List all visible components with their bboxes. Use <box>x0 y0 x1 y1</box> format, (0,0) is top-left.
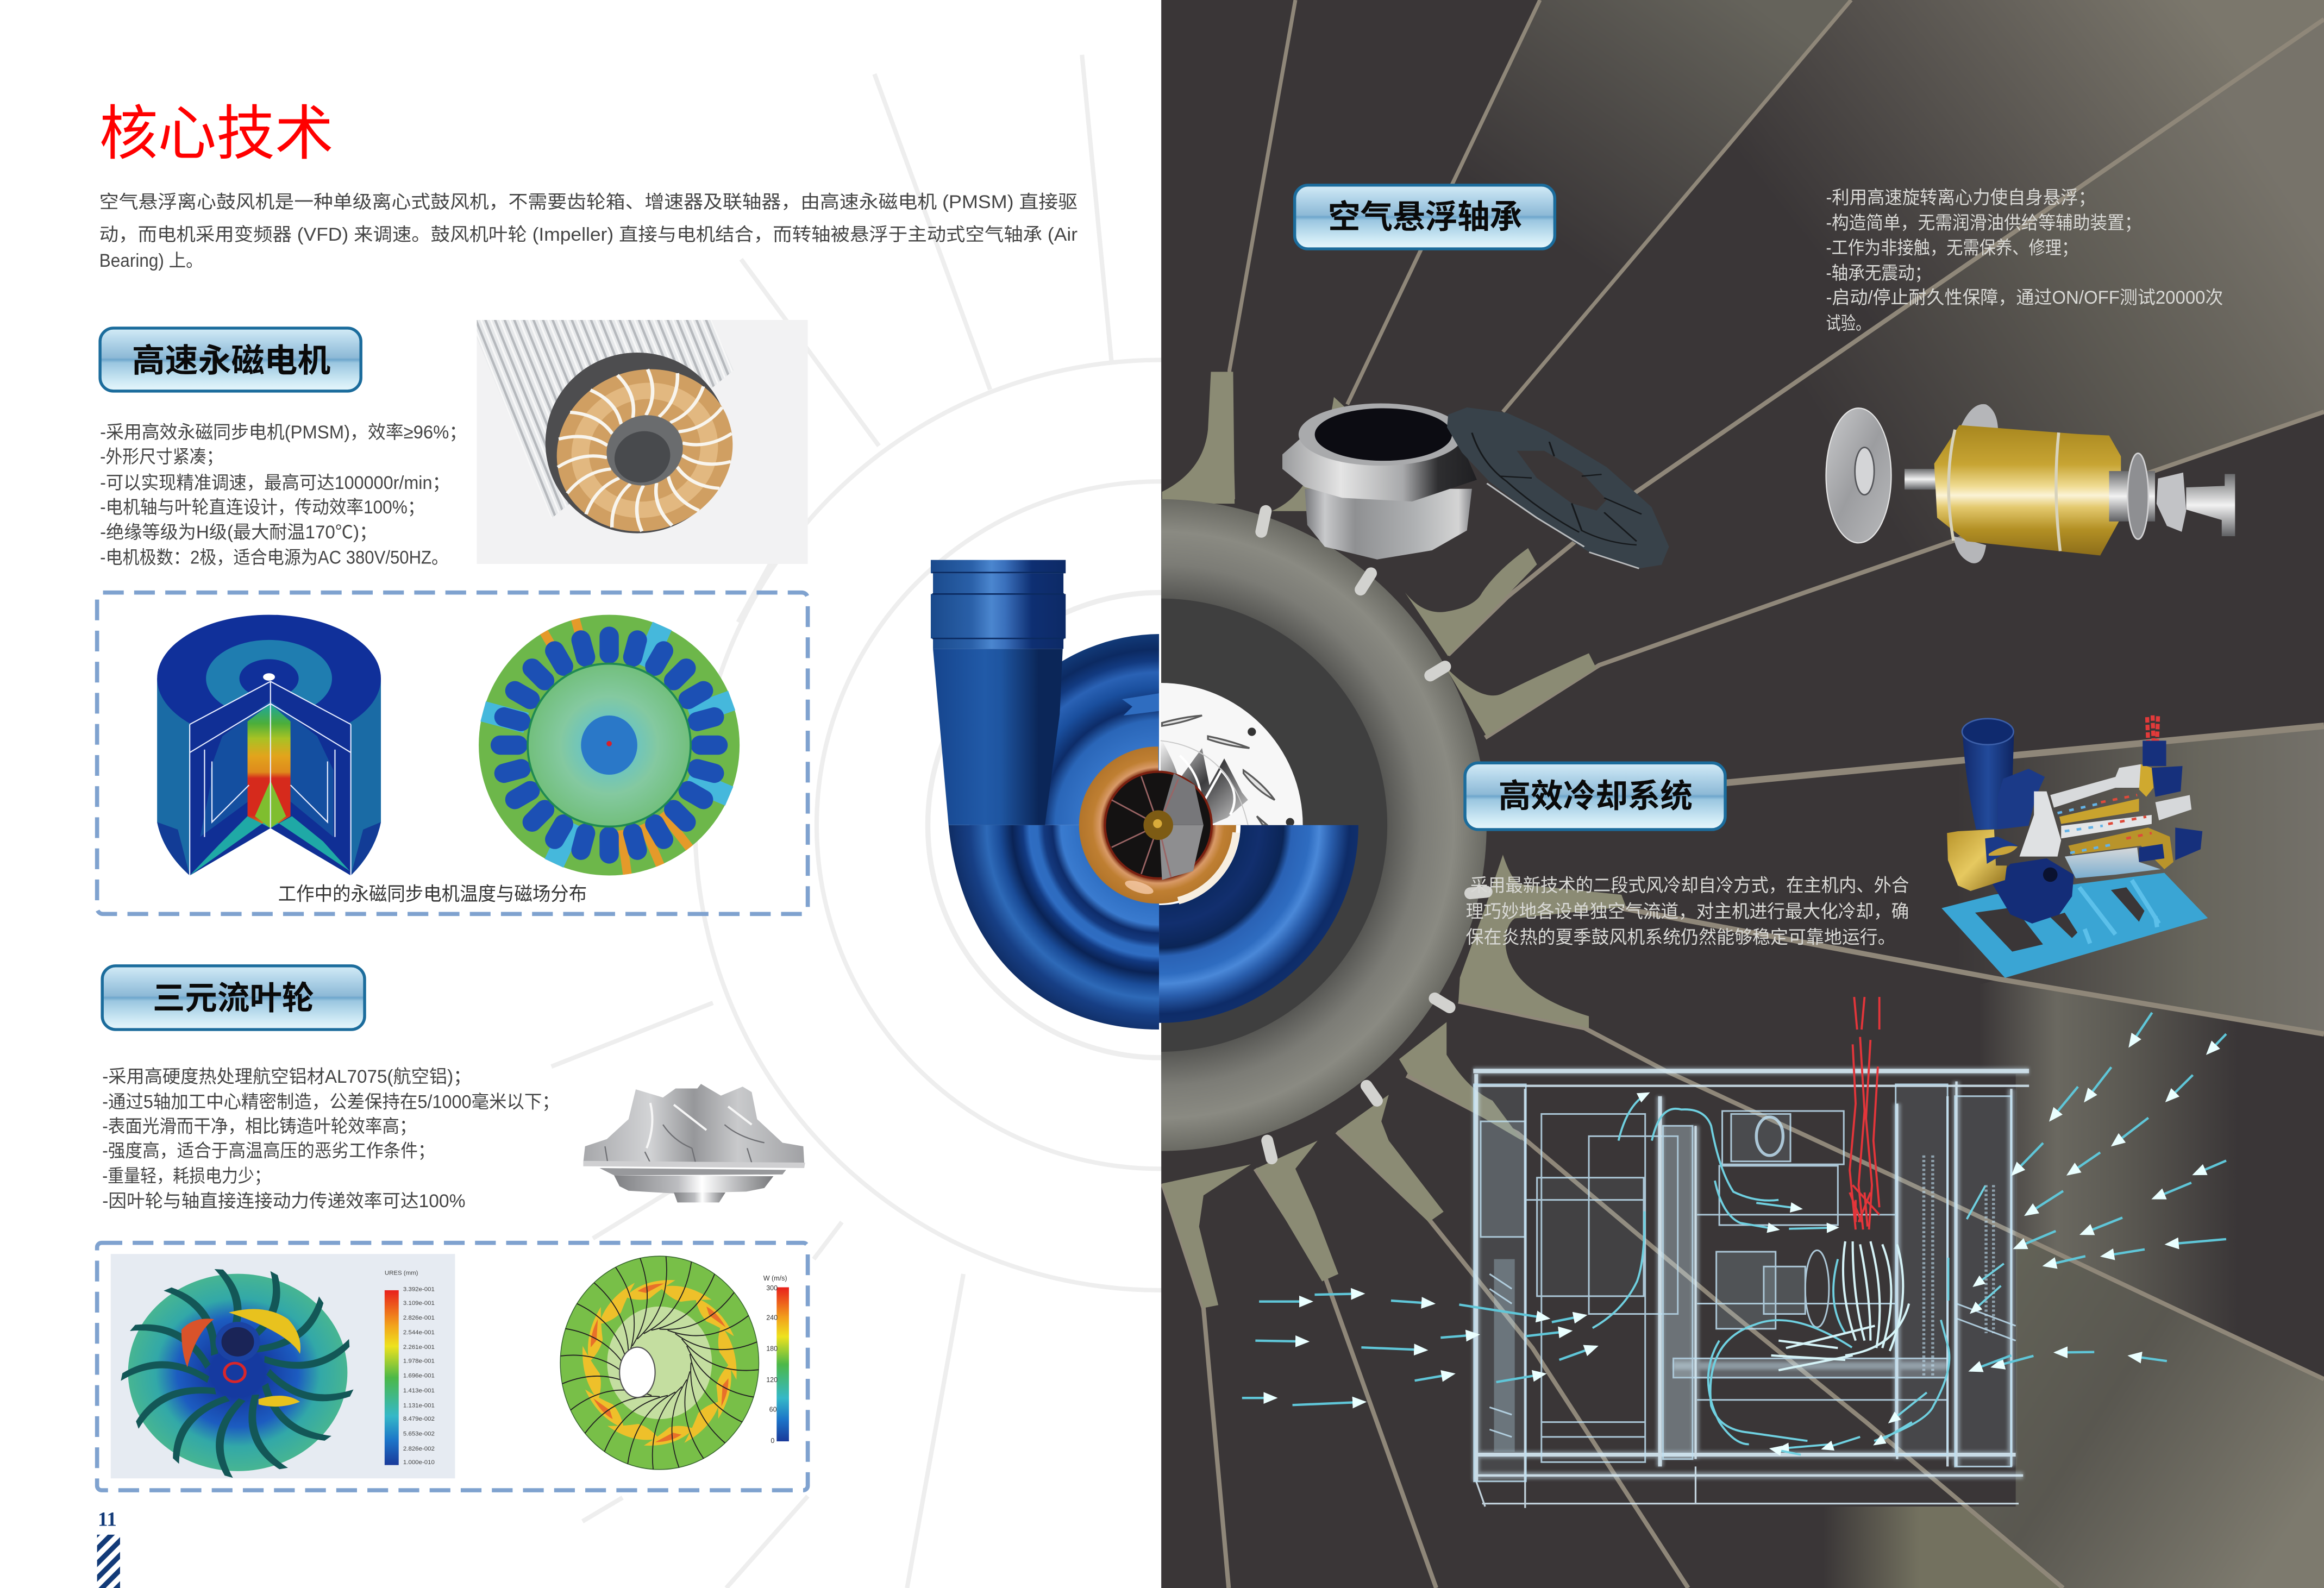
thermal cylinder simulation <box>157 615 381 875</box>
outlet pipe <box>931 560 1066 825</box>
displacement scale labels: 2.826e-001 <box>403 1315 435 1321</box>
arrow detail on the upper volute <box>1122 693 1159 715</box>
displacement scale labels: 3.392e-001 <box>403 1286 435 1292</box>
exhaust heat <box>2147 715 2158 740</box>
impeller feature list: -表面光滑而干净，相比铸造叶轮效率高； <box>102 1116 416 1137</box>
foil plate <box>1447 407 1669 568</box>
cutaway blower unit <box>1941 715 2208 978</box>
impeller feature list: -强度高，适合于高温高压的恶劣工作条件； <box>102 1141 435 1162</box>
displacement scale labels: 1.000e-010 <box>403 1459 435 1466</box>
displacement simulation <box>111 1254 789 1480</box>
flange strip and groove <box>1949 430 2060 551</box>
heading button: 3D flow impeller: 三元流叶轮 <box>153 980 314 1016</box>
small impeller <box>2157 473 2186 532</box>
silver end disc <box>1826 408 1891 543</box>
photo: motor stator <box>477 320 808 564</box>
cooling description: 理巧妙地各设单独空气流道，对主机进行最大化冷却，确 <box>1466 901 1909 922</box>
inlet pipe <box>1963 732 2014 830</box>
displacement scale labels: URES (mm) <box>385 1270 418 1276</box>
gold body <box>1934 425 2121 556</box>
dark inner hub disc <box>1161 599 1387 1052</box>
velocity scale labels: 60 <box>769 1406 777 1414</box>
bearing opening <box>1315 408 1452 461</box>
dashed panel: motor simulations <box>97 593 808 914</box>
upper gold half <box>2059 799 2139 824</box>
impeller feature list: -通过5轴加工中心精密制造，公差保持在5/1000毫米以下； <box>102 1092 560 1113</box>
motor feature list: -电机极数：2极，适合电源为AC 380V/50HZ。 <box>100 548 448 568</box>
page corner stripes <box>97 1535 120 1588</box>
x-ray cabinet with airflow <box>1242 997 2226 1508</box>
bearing feature list: -利用高速旋转离心力使自身悬浮； <box>1826 187 2096 208</box>
motor feature list: -电机轴与叶轮直连设计，传动效率100%； <box>100 497 424 518</box>
left page background <box>0 0 1162 1588</box>
displacement scale labels: 1.131e-001 <box>403 1402 435 1409</box>
velocity simulation <box>560 1256 759 1470</box>
cooling description: 保在炎热的夏季鼓风机系统仍然能够稳定可靠地运行。 <box>1466 927 1896 948</box>
intake arrows, right side <box>1970 1013 2226 1371</box>
heading button: high-speed permanent magnet motor <box>100 328 361 391</box>
intro paragraph: Bearing) 上。 <box>99 250 203 271</box>
heading button: air foil bearing: 空气悬浮轴承 <box>1328 199 1522 235</box>
white crescent beside the inlet <box>1159 825 1241 905</box>
rear silver fittings <box>2156 795 2191 820</box>
velocity scale labels <box>763 1275 787 1445</box>
housing body <box>1305 489 1472 560</box>
volute lower-right quarter <box>1159 825 1358 1023</box>
top silver tube <box>2050 764 2152 808</box>
shaft <box>1905 469 1937 489</box>
bearing feature list <box>1826 187 2223 334</box>
coolant marks <box>2058 795 2152 853</box>
impeller slots <box>1162 715 1275 825</box>
photo: gold motor assembly <box>1826 404 2235 563</box>
displacement scale labels: 1.413e-001 <box>403 1388 435 1394</box>
bearing feature list: 试验。 <box>1826 313 1870 334</box>
housing rim <box>1299 404 1463 466</box>
cooling description: 采用最新技术的二段式风冷却自冷方式，在主机内、外合 <box>1470 875 1909 896</box>
motor feature list: -可以实现精准调速，最高可达100000r/min； <box>100 473 450 493</box>
displacement scale labels: 2.261e-001 <box>403 1344 435 1351</box>
displacement colour scale <box>385 1290 399 1465</box>
velocity scale labels: 180 <box>766 1345 778 1353</box>
bearing feature list: -启动/停止耐久性保障，通过ON/OFF测试20000次 <box>1826 287 2223 308</box>
gold end plate <box>2139 764 2153 797</box>
pale fan pattern on the left page <box>552 55 1626 1588</box>
heading button: high-speed permanent magnet motor: 高速永磁电机 <box>132 342 330 379</box>
cabinet glow <box>1473 1071 2029 1482</box>
rear flange <box>2128 453 2148 539</box>
rear casing <box>2152 766 2202 860</box>
displacement scale labels: 3.109e-001 <box>403 1300 435 1307</box>
lower gold half <box>2069 827 2173 869</box>
page number: 11 <box>98 1508 117 1530</box>
displacement scale labels: 2.544e-001 <box>403 1329 435 1336</box>
cabinet bright frame <box>1473 1071 2029 1508</box>
title: 核心技术 <box>99 101 334 167</box>
velocity scale labels: W (m/s) <box>763 1275 787 1282</box>
lower motor shell <box>2065 848 2161 878</box>
impeller feature list <box>102 1066 560 1212</box>
hub pegs <box>1261 511 1487 1158</box>
displacement scale labels <box>385 1270 435 1466</box>
scroll casing bottom <box>1993 858 2074 924</box>
velocity colour scale <box>776 1287 789 1441</box>
intro paragraph: 空气悬浮离心鼓风机是一种单级离心式鼓风机，不需要齿轮箱、增速器及联轴器，由高速永磁电机 (PMSM) 直接驱 <box>99 192 1078 212</box>
blue blower volute <box>931 560 1358 1030</box>
scroll casing top <box>1998 769 2045 830</box>
motor feature list: -绝缘等级为H级(最大耐温170℃)； <box>100 522 377 543</box>
impeller blades <box>1161 738 1248 825</box>
flange ears <box>1953 404 1998 563</box>
gold nozzle <box>1947 830 2007 891</box>
photo: bearing housing and foil plate <box>1282 404 1669 568</box>
volute upper-left quarter <box>969 634 1160 825</box>
bearing feature list: -轴承无震动； <box>1826 263 1931 284</box>
motor feature list <box>100 422 467 568</box>
heading button: efficient cooling system: 高效冷却系统 <box>1499 778 1693 814</box>
panel caption: 工作中的永磁同步电机温度与磁场分布 <box>278 883 587 905</box>
heading button: 3D flow impeller <box>102 966 365 1030</box>
bearing feature list: -构造简单，无需润滑油供给等辅助装置； <box>1826 212 2141 233</box>
impeller feature list: -因叶轮与轴直接连接动力传递效率可达100% <box>102 1191 465 1212</box>
internal airflow curves <box>1593 1093 2004 1455</box>
velocity scale labels: 240 <box>766 1314 778 1321</box>
cabinet detail lines <box>1474 1084 2016 1482</box>
copper winding <box>534 345 756 556</box>
impeller feature list: -重量轻，耗损电力少； <box>102 1166 271 1187</box>
displacement scale labels: 2.826e-002 <box>403 1446 435 1452</box>
bearing feature list: -工作为非接触，无需保养、修理； <box>1826 238 2078 259</box>
velocity scale labels: 0 <box>771 1437 774 1445</box>
displacement scale labels: 8.479e-002 <box>403 1416 435 1422</box>
red hot air <box>1850 997 1880 1229</box>
blue base frame <box>1941 873 2208 978</box>
motor feature list: -采用高效永磁同步电机(PMSM)，效率≥96%； <box>100 422 467 443</box>
photo: aluminium impeller <box>583 1084 805 1202</box>
fan blades on the right page <box>1162 0 2324 1588</box>
inlet with dark rotor blades <box>1105 772 1212 880</box>
rear pipe <box>2143 740 2166 766</box>
ring highlight <box>1124 878 1155 897</box>
motor feature list: -外形尺寸紧凑； <box>100 447 223 467</box>
diffuser <box>2186 474 2235 536</box>
fan airflow swirl <box>1771 1241 1909 1370</box>
intake arrows, left side <box>1242 1294 1596 1405</box>
right shaft <box>2109 471 2155 522</box>
stator hot and cold bands <box>480 618 735 875</box>
displacement scale labels: 1.978e-001 <box>403 1358 435 1365</box>
velocity scale labels: 300 <box>766 1284 778 1292</box>
magnetic field disc simulation <box>479 615 740 875</box>
shaft with airflow marks <box>2061 815 2152 838</box>
impeller disc quarter <box>1161 683 1303 825</box>
cooling description <box>1466 875 1909 948</box>
volute lower-left quarter <box>949 825 1159 1030</box>
orange inlet ring <box>1079 746 1236 903</box>
intro paragraph: 动，而电机采用变频器 (VFD) 来调速。鼓风机叶轮 (Impeller) 直接与电机结合，而转轴被悬浮于主动式空气轴承 (Air <box>99 224 1078 245</box>
dark right page background <box>1161 0 2324 1588</box>
displacement scale labels: 5.653e-002 <box>403 1431 435 1438</box>
silver front casing <box>2020 792 2061 857</box>
intro paragraph <box>99 192 1078 271</box>
heading button: air foil bearing <box>1295 185 1555 249</box>
displacement scale labels: 1.696e-001 <box>403 1372 435 1379</box>
impeller feature list: -采用高硬度热处理航空铝材AL7075(航空铝)； <box>102 1066 471 1087</box>
velocity scale labels: 120 <box>766 1376 778 1384</box>
grey fan hub ring <box>1161 499 1487 1151</box>
heading button: efficient cooling system <box>1465 763 1725 830</box>
housing flange band <box>1282 439 1477 501</box>
